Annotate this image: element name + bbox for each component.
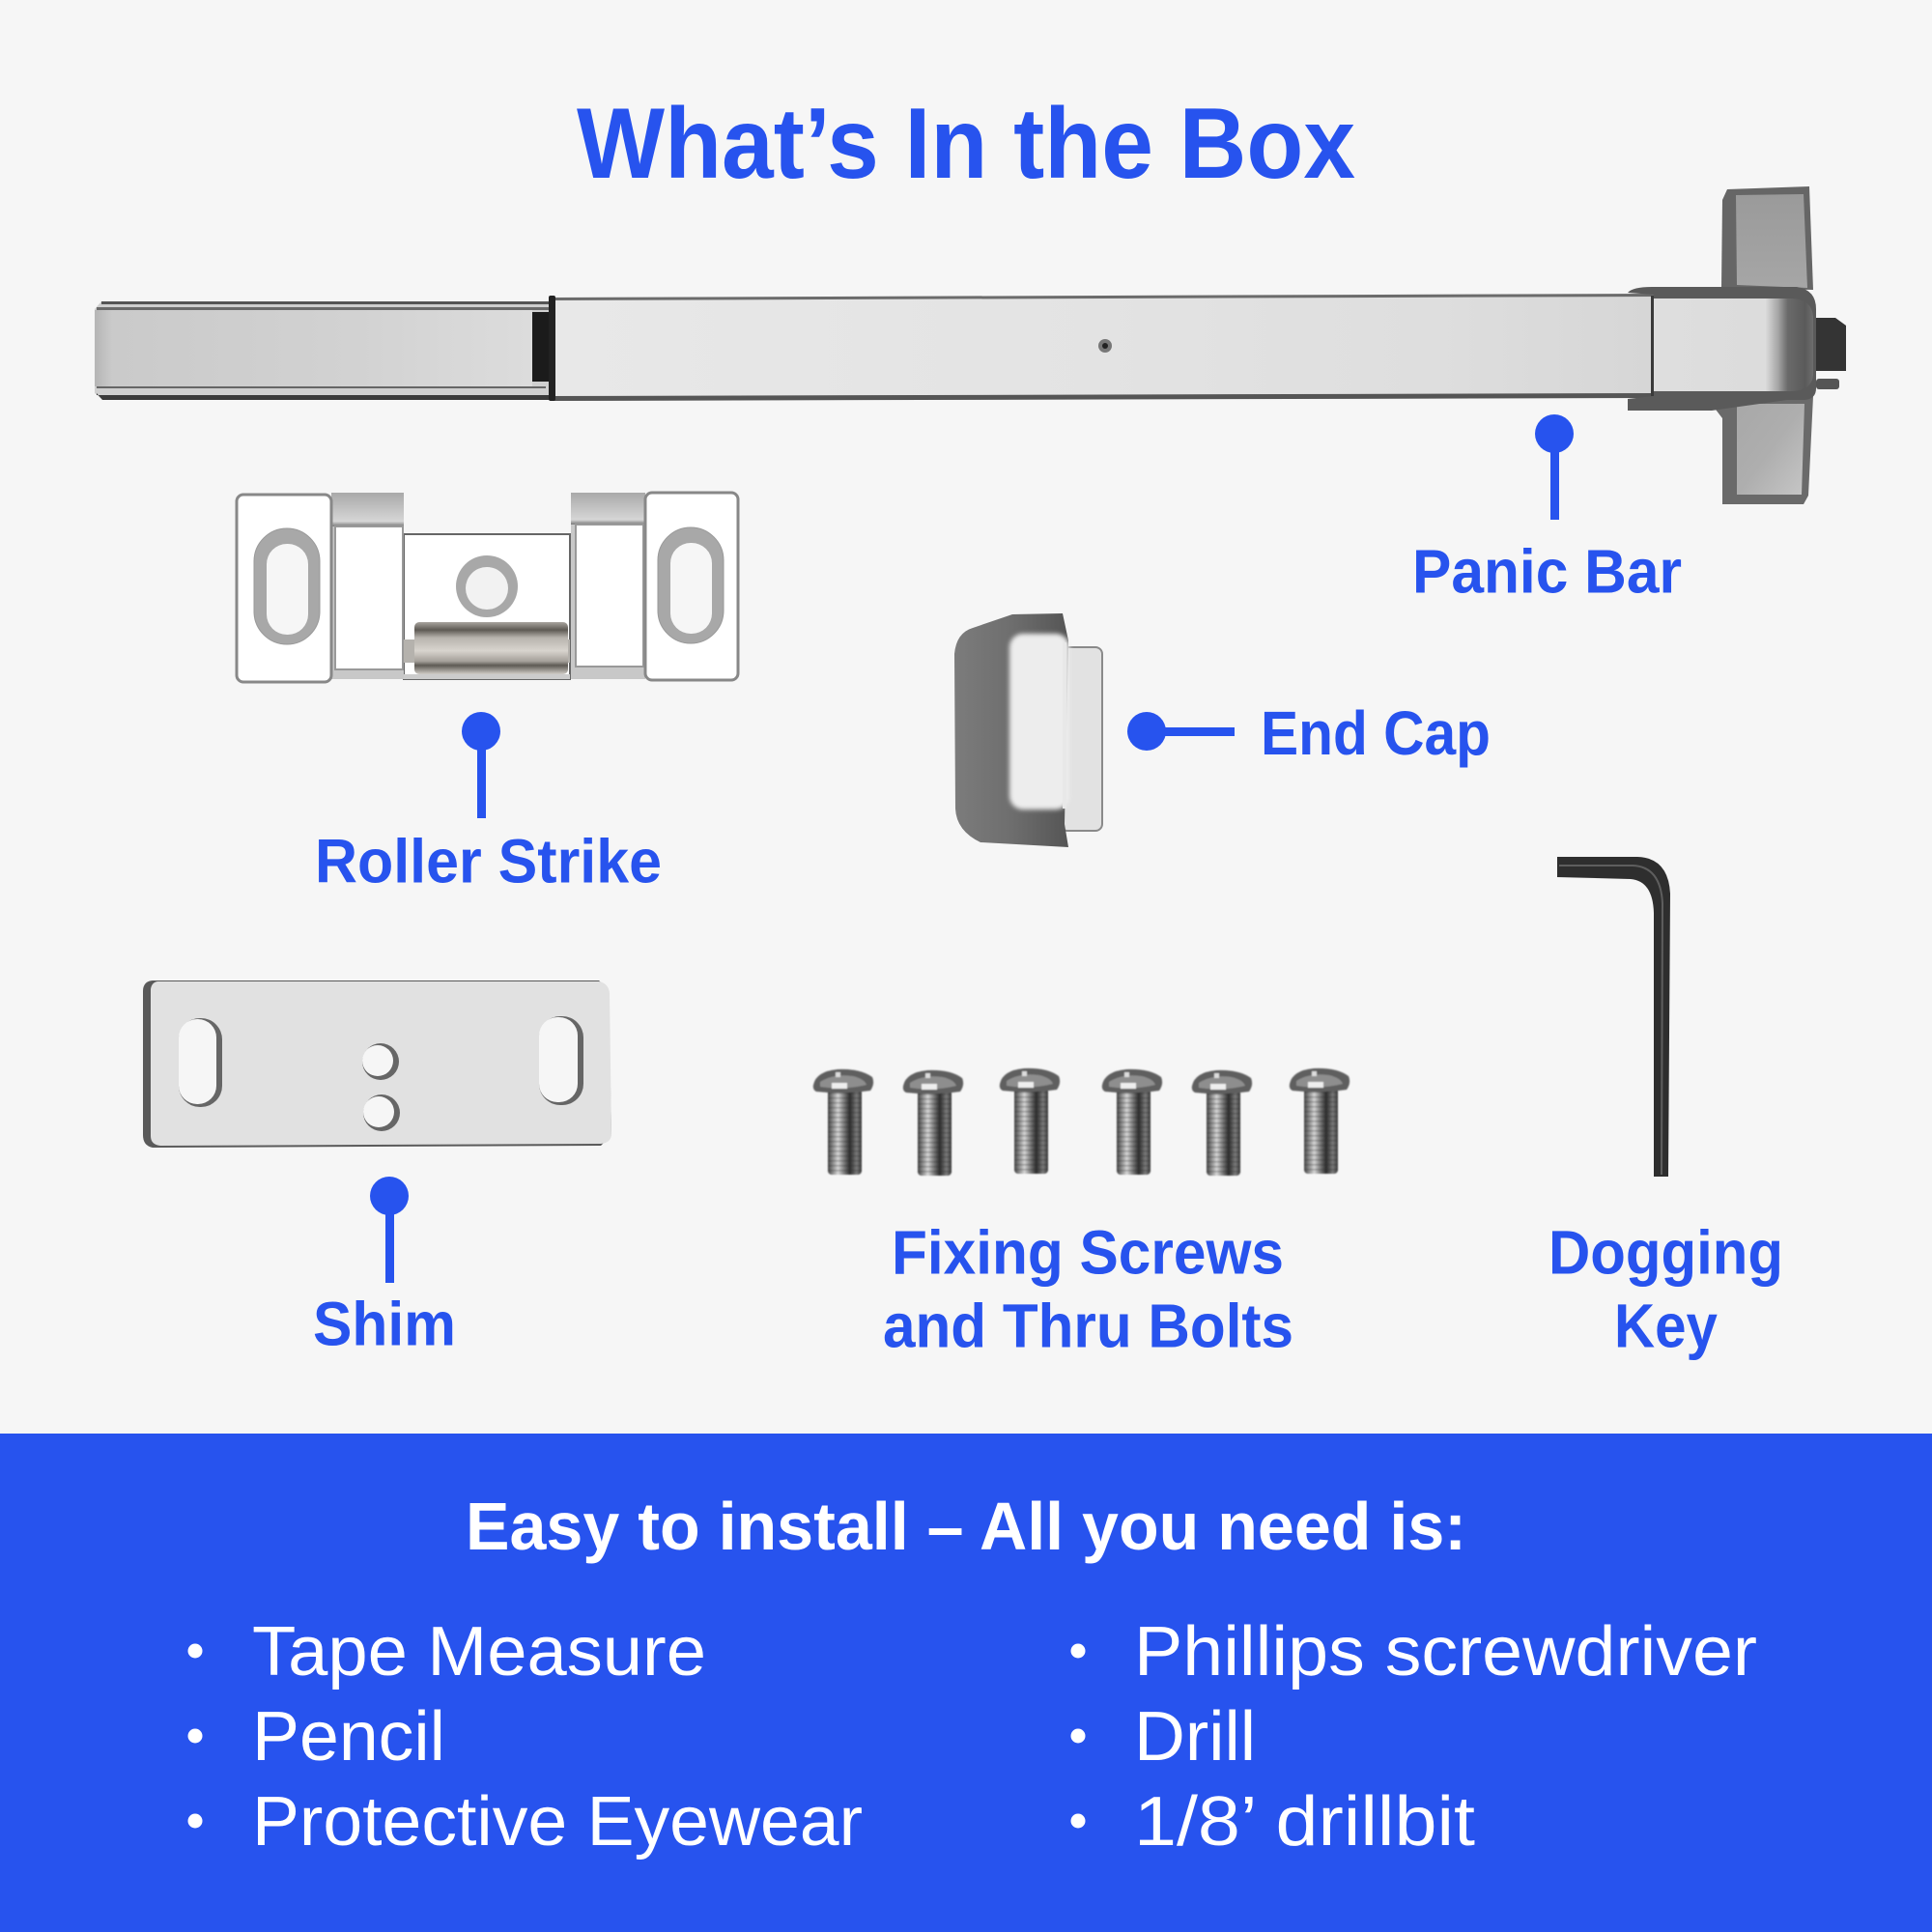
roller strike product — [237, 493, 738, 682]
roller — [404, 622, 570, 679]
title: What’s In the Box — [577, 88, 1355, 200]
left plate — [237, 495, 331, 682]
left tool list — [187, 1613, 863, 1861]
label: fixing screws and thru bolts: and Thru Bolts — [883, 1291, 1293, 1360]
housing face — [1654, 298, 1813, 391]
latch bolt — [1816, 318, 1846, 371]
right slot — [539, 1016, 583, 1105]
right tool list: Phillips screwdriver — [1134, 1613, 1757, 1690]
pin: roller strike — [462, 712, 500, 818]
cap face — [1009, 634, 1069, 810]
panel heading: Easy to install – All you need is: — [466, 1489, 1466, 1564]
bottom handle — [1713, 396, 1813, 504]
label: fixing screws and thru bolts — [883, 1217, 1293, 1360]
right tool list: Drill — [1134, 1698, 1256, 1776]
left tool list: Pencil — [252, 1698, 445, 1776]
left tool list: Protective Eyewear — [252, 1783, 863, 1861]
right plate — [645, 493, 738, 680]
label: shim: Shim — [313, 1289, 456, 1358]
key highlight — [1559, 866, 1662, 1175]
right block — [571, 493, 645, 679]
housing seam — [1651, 296, 1654, 396]
label: end cap: End Cap — [1261, 698, 1491, 768]
left tool list: Tape Measure — [252, 1613, 706, 1690]
upper hole — [362, 1043, 399, 1080]
top handle face — [1736, 194, 1807, 288]
key body — [1557, 857, 1670, 1177]
label: fixing screws and thru bolts: Fixing Screws — [892, 1217, 1284, 1287]
latch pin — [1816, 379, 1839, 389]
right slot — [658, 527, 724, 643]
right tool list: 1/8’ drillbit — [1134, 1783, 1475, 1861]
pin: end cap — [1127, 712, 1235, 751]
plate face — [151, 981, 611, 1146]
label: dogging key: Dogging — [1548, 1217, 1783, 1287]
label: dogging key — [1548, 1217, 1783, 1360]
panel background — [0, 1434, 1932, 1932]
panic bar product — [95, 186, 1846, 504]
lower hole — [363, 1094, 400, 1131]
end cap product — [954, 613, 1102, 847]
label: panic bar: Panic Bar — [1412, 537, 1682, 607]
left slot — [179, 1018, 222, 1107]
center plate — [404, 534, 570, 679]
label: roller strike: Roller Strike — [315, 827, 662, 896]
right tool list — [1070, 1613, 1757, 1861]
housing — [1628, 287, 1816, 411]
insert plate — [1061, 647, 1102, 831]
left block — [331, 493, 404, 679]
top handle — [1721, 186, 1813, 290]
main bar — [549, 294, 1654, 401]
left slot — [254, 528, 320, 644]
fixing screws product — [813, 1068, 1350, 1176]
label: dogging key: Key — [1614, 1291, 1718, 1360]
bottom handle face — [1737, 404, 1804, 495]
sliding bar — [95, 301, 552, 400]
cap body — [954, 613, 1068, 847]
shim product — [143, 980, 611, 1148]
pin: shim — [370, 1177, 409, 1283]
plate shadow edge — [143, 980, 611, 1148]
center hole — [456, 555, 518, 617]
panel: tools needed — [0, 1434, 1932, 1932]
pin: panic bar — [1535, 414, 1574, 520]
dogging key product — [1557, 857, 1670, 1177]
